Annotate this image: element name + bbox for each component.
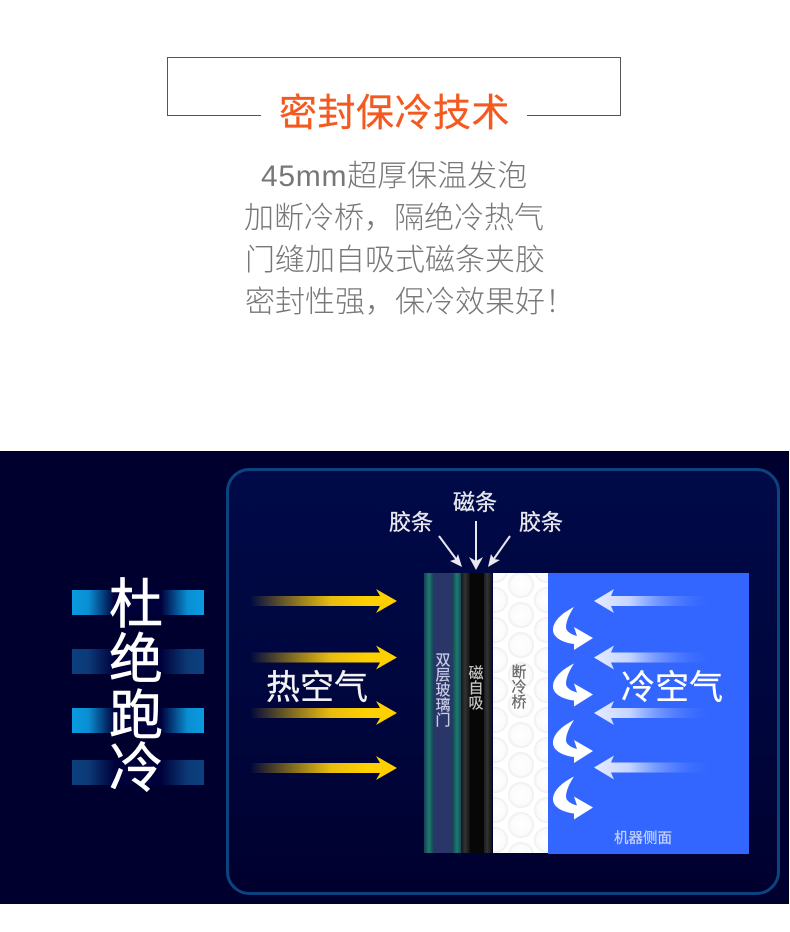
thermal break layer: 冷	[511, 679, 527, 696]
callout labels: strips: 磁条	[453, 490, 497, 515]
hot air arrows	[250, 589, 397, 780]
slogan bars	[72, 590, 204, 785]
curved airflow arrows	[553, 607, 593, 820]
title frame	[168, 58, 620, 116]
magnetic strip layer: 自	[468, 680, 484, 697]
description text: 45mm超厚保温发泡	[261, 160, 527, 193]
thermal break layer: 断	[511, 664, 527, 681]
cold air arrows	[594, 589, 714, 780]
slogan: vertical heading: 冷	[109, 739, 163, 799]
slogan: vertical heading: 绝	[109, 630, 163, 690]
callout labels: strips: 胶条	[389, 510, 433, 535]
description text: 加断冷桥，隔绝冷热气	[244, 202, 544, 235]
label: hot air: 热空气	[266, 669, 368, 707]
double glass layer: 双	[435, 652, 451, 669]
slogan: vertical heading	[109, 575, 163, 799]
label: cold air: 冷空气	[621, 669, 723, 707]
machine side panel	[548, 573, 749, 854]
panel: diagram frame	[228, 470, 778, 894]
double glass layer: 层	[435, 667, 451, 684]
magnetic strip layer	[461, 573, 492, 853]
slogan: vertical heading: 杜	[109, 575, 163, 635]
description text: 密封性强，保冷效果好！	[245, 286, 575, 319]
double glass layer: 璃	[435, 697, 451, 714]
magnetic strip layer: 磁	[468, 665, 484, 682]
label: machine side: 机器侧面	[614, 830, 672, 847]
magnetic strip layer: 吸	[468, 695, 484, 712]
double glass layer	[424, 573, 462, 853]
double glass layer: 门	[435, 712, 451, 729]
slogan: vertical heading: 跑	[109, 686, 163, 746]
thermal break layer: 桥	[511, 694, 527, 711]
description text	[244, 160, 575, 319]
callout labels: strips: 胶条	[519, 510, 563, 535]
double glass layer: 玻	[435, 682, 451, 699]
pointer arrows	[439, 521, 510, 567]
title: 密封保冷技术	[279, 93, 510, 135]
callout labels: strips	[389, 490, 563, 535]
dark background band	[0, 451, 789, 904]
description text: 门缝加自吸式磁条夹胶	[245, 244, 545, 277]
thermal break layer	[493, 573, 548, 853]
